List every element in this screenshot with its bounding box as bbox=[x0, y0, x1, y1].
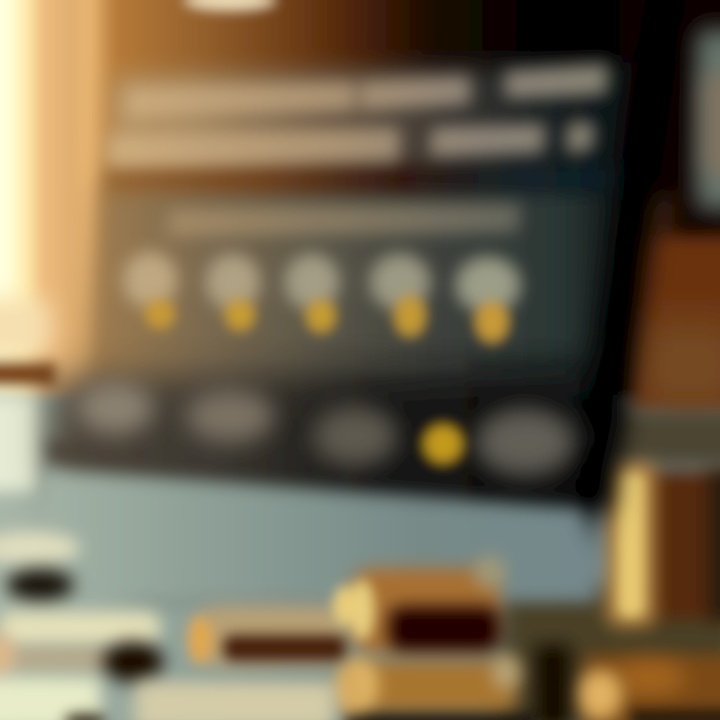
subheading blur bbox=[168, 204, 520, 236]
coin stack left bbox=[188, 586, 366, 714]
desk strip restoring the monitor's bottom edge bbox=[42, 470, 595, 600]
right side background objects bbox=[606, 0, 720, 627]
heading blur bbox=[108, 64, 608, 166]
five star rating blurs bbox=[123, 252, 520, 343]
rating item 3 bbox=[285, 254, 339, 333]
cups bottom bbox=[0, 678, 335, 720]
desk surface bbox=[0, 395, 720, 720]
rating item 2 bbox=[206, 254, 260, 331]
coin stack right bbox=[535, 645, 720, 720]
gold cylinder bbox=[606, 462, 720, 627]
rating item 5 bbox=[456, 257, 520, 343]
coin stack centre bbox=[342, 556, 535, 720]
monitor bbox=[42, 0, 690, 600]
rating item 1 bbox=[123, 252, 177, 329]
bottom row labels blur bbox=[77, 382, 575, 476]
background wall and window light bbox=[0, 0, 720, 400]
cup left middle bbox=[0, 612, 164, 683]
cup left top bbox=[0, 532, 80, 602]
gold dot bbox=[423, 424, 463, 464]
rating item 4 bbox=[370, 254, 430, 337]
